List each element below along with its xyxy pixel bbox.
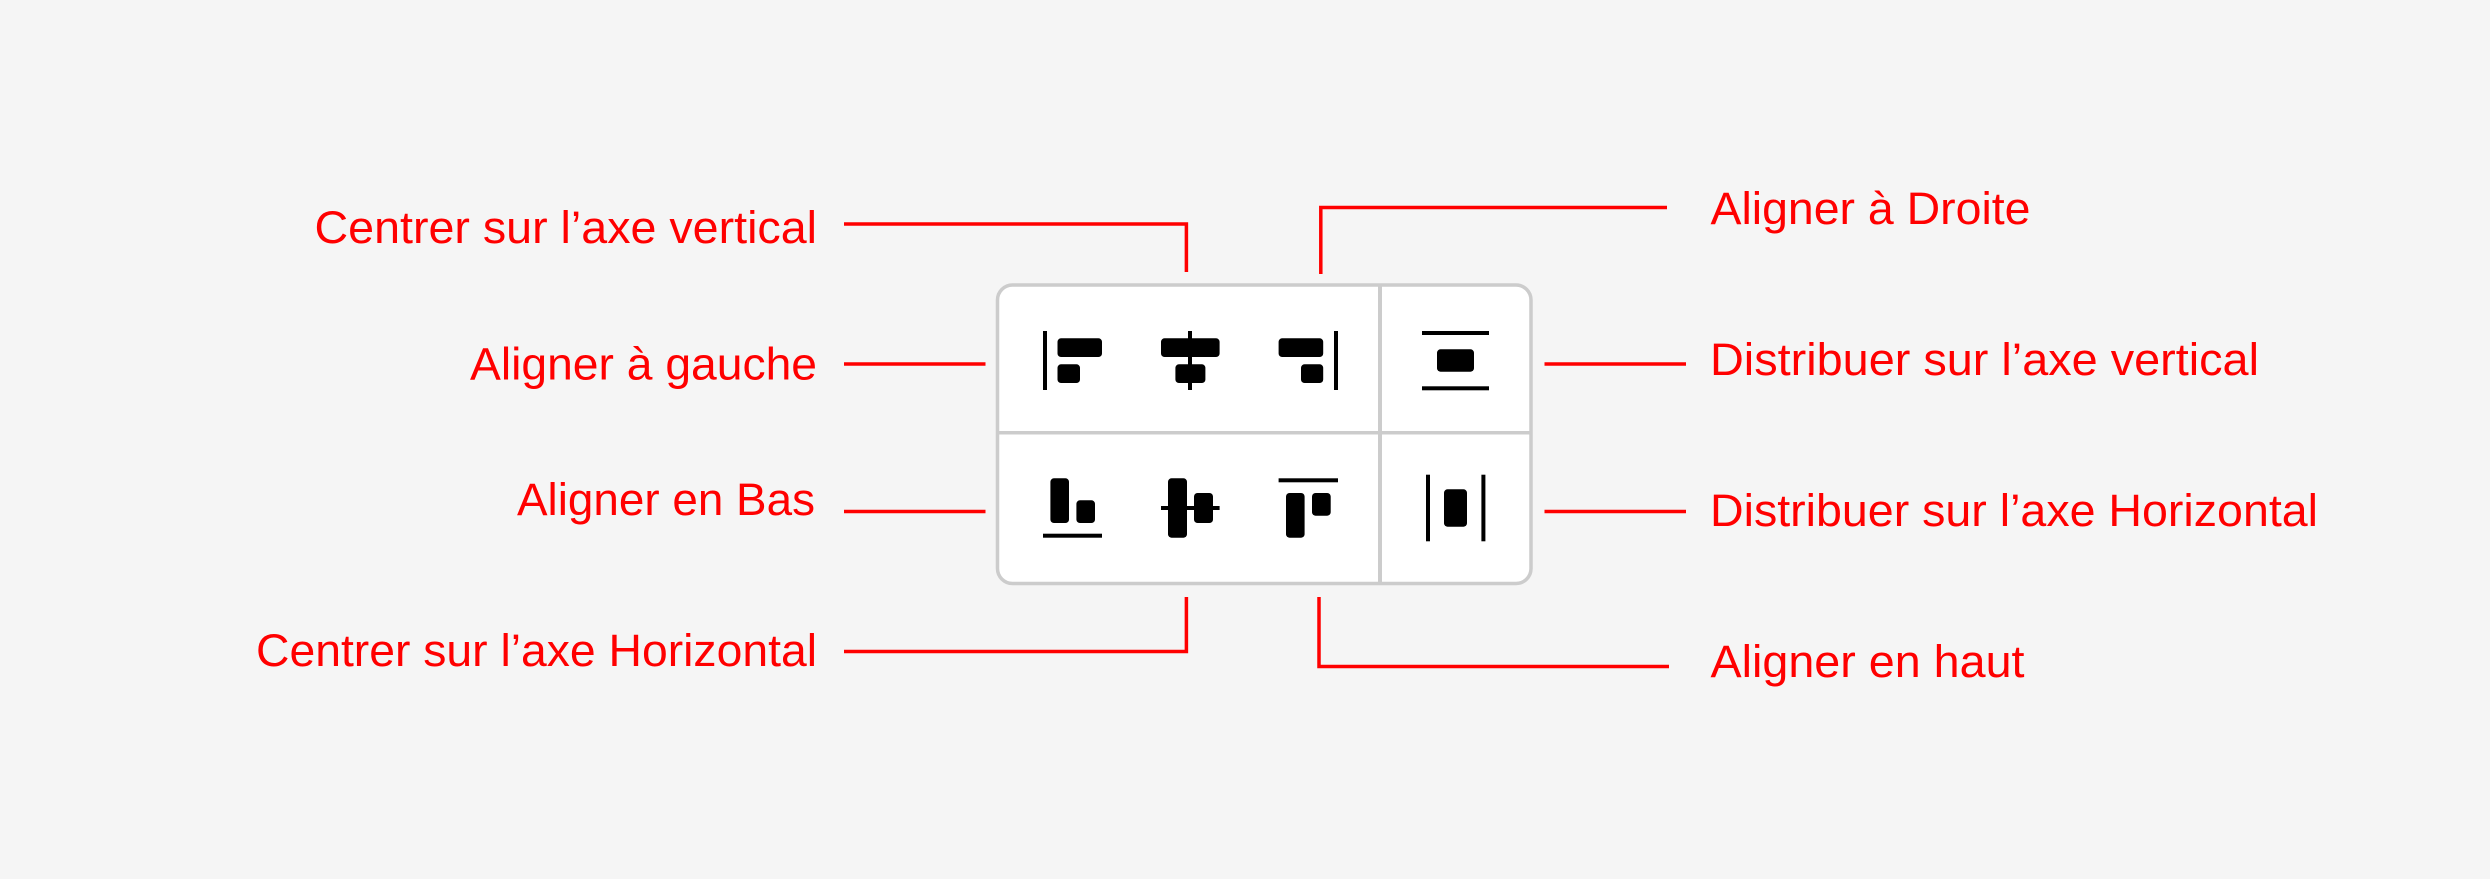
label: centrer sur l'axe horizontal: Centrer sur l’axe Horizontal	[256, 625, 817, 676]
arrow: centrer sur l'axe horizontal	[844, 597, 1186, 652]
icon: align bottom	[1043, 478, 1102, 538]
arrow: distribuer sur l'axe horizontal	[1544, 510, 1686, 513]
arrow: aligner à gauche	[844, 362, 986, 366]
label: aligner à gauche: Aligner à gauche	[470, 338, 817, 390]
arrow: distribuer sur l'axe vertical	[1544, 362, 1686, 366]
label: distribuer sur l'axe vertical: Distribuer sur l’axe vertical	[1710, 334, 2259, 385]
label: distribuer sur l'axe horizontal: Distribuer sur l’axe Horizontal	[1710, 485, 2318, 536]
icon: align top	[1279, 478, 1338, 538]
icon: align right	[1279, 331, 1338, 390]
arrow: aligner en bas	[844, 510, 986, 513]
icon: center on horizontal axis	[1161, 478, 1220, 538]
label: centrer sur l'axe vertical: Centrer sur l’axe vertical	[314, 202, 817, 253]
icon: center on vertical axis	[1161, 331, 1220, 390]
label: aligner en haut: Aligner en haut	[1710, 636, 2025, 687]
label: aligner en bas: Aligner en Bas	[517, 474, 815, 525]
icon: distribute on horizontal axis	[1426, 475, 1485, 541]
icon: distribute on vertical axis	[1422, 331, 1489, 390]
label: aligner à droite: Aligner à Droite	[1710, 183, 2030, 234]
arrow: centrer sur l'axe vertical	[844, 224, 1186, 272]
panel: alignment toolbar	[998, 285, 1531, 584]
arrow: aligner à droite	[1321, 208, 1667, 274]
icon: align left	[1043, 331, 1102, 390]
arrow: aligner en haut	[1319, 597, 1669, 666]
